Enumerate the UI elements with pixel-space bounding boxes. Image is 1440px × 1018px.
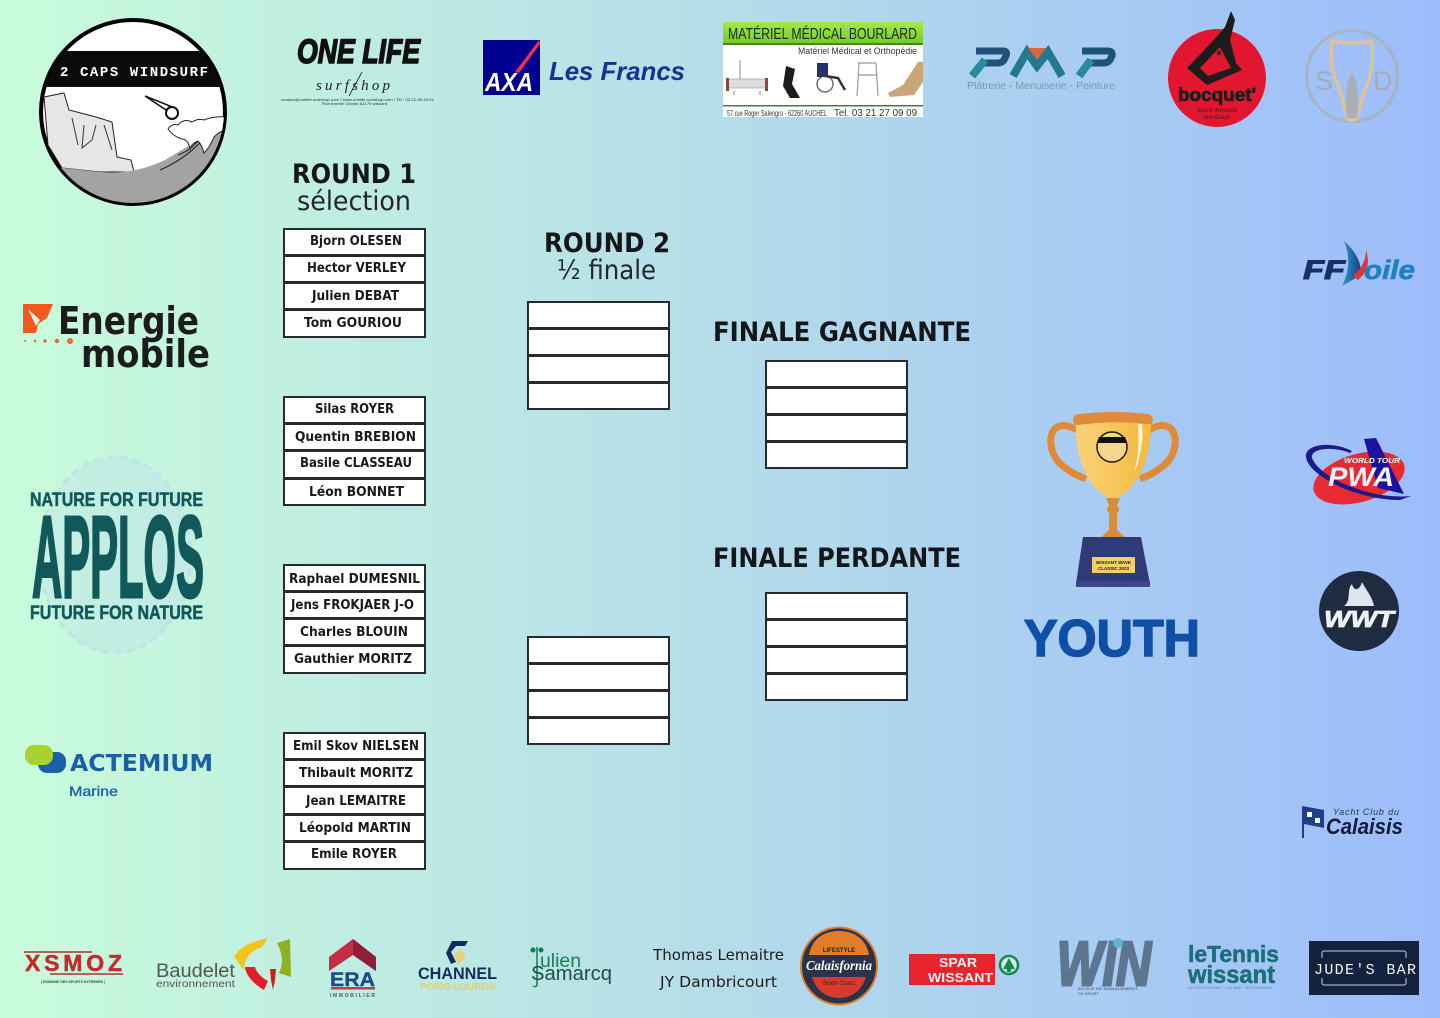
logo: Le Tennis Wissant: leTennis [1188,941,1279,967]
logo: Matériel Médical Bourlard: 57 rue Roger Salengro - 62260 AUCHEL [727,109,827,118]
bracket: round 1 group 3 [284,565,425,673]
bracket: round 1 group 4: Jean LEMAITRE [305,793,406,809]
text: JY Dambricourt: JY Dambricourt [659,973,777,991]
logo: Baudelet environnement: Baudelet [156,961,236,982]
logo: One Life surfshop: contact@onelife-surfshop.com / www.onelife-surfshop.com / Tel : 03.21.96.43.01 [281,97,435,102]
logo: Applos [30,457,204,653]
bracket: round 2 top [528,302,669,409]
bracket: round 1 group 1: Julien DEBAT [311,288,400,304]
plaque [1092,557,1135,573]
logo: Baudelet environnement [156,938,291,990]
icon: walking frame [857,63,878,96]
logo: Matériel Médical Bourlard: Matériel Médical et Orthopédie [798,46,917,56]
logo: PWA World Tour [1306,438,1411,514]
logo: Energie mobile [23,299,210,376]
logo: Matériel Médical Bourlard [723,22,923,119]
logo: WWT [1319,571,1399,651]
logo: SD dental: D [1373,66,1392,96]
bracket: round 1 group 4: Thibault MORITZ [299,765,413,781]
bracket: round 1 group 3: Jens FROKJAER J-O [290,597,414,613]
logo: ERA Immobilier: ERA [330,970,375,991]
bracket: round 1 group 1: Hector VERLEY [307,260,406,276]
title: Round 1: sélection [297,186,411,217]
logo: Bocquet: bocquet' [1178,85,1256,105]
logo: Actemium Marine: ACTEMIUM [70,751,213,777]
text: APPLOS [32,492,204,622]
logo: 2 Caps Windsurf [40,20,230,210]
logo: WIN: WIN [1057,930,1152,999]
logo: Jude's Bar [1309,941,1419,995]
bracket: round 1 group 1: Tom GOURIOU [304,315,402,331]
logo: Le Tennis Wissant [1187,941,1279,990]
logo: Jude's Bar: JUDE'S BAR [1314,962,1416,979]
logo: Applos: NATURE FOR FUTURE [30,490,203,511]
logo: Spar Wissant: WISSANT [928,970,993,985]
logo: SD dental [1306,30,1398,122]
icon: ankle brace [783,66,800,98]
logo: Le Tennis Wissant: UN RESTAURANT · UN BAR · RESTAURANT [1188,985,1274,990]
logo: PMP: Plâtrerie - Menuiserie - Peinture [967,81,1115,92]
logo: FF Voile: FF [1303,255,1347,285]
logo: PWA World Tour: WORLD TOUR [1344,458,1400,465]
title: Round 2 [544,228,670,286]
logo: Calaisfornia [801,928,877,1004]
logo: Baudelet environnement: environnement [156,979,235,990]
logo: XSMOZ: | DOMAINE DES SPORTS EXTREMES | [41,980,105,984]
logo: Actemium Marine [25,745,213,799]
logo: Spar Wissant: SPAR [939,955,978,970]
logo: Energie mobile: mobile [81,332,210,376]
logo: Le Tennis Wissant: wissant [1187,961,1276,989]
logo: Yacht Club du Calaisis: Calaisis [1326,814,1403,839]
bracket: round 1 group 2: Quentin BREBION [295,429,416,445]
logo: ERA Immobilier [329,939,376,999]
logo: Channel Poids Lourds [418,941,497,993]
logo: Calaisfornia: LIFESTYLE [823,948,855,954]
title: Finale perdante: FINALE PERDANTE [713,543,961,574]
logo: Bocquet [1168,11,1266,127]
title: Round 2: ROUND 2 [544,228,670,259]
title: Finale gagnante: FINALE GAGNANTE [713,317,971,348]
decorative globe [39,457,191,653]
logo: Bocquet: les-Eaux [1204,114,1231,121]
logo: ERA Immobilier: IMMOBILIER [330,993,375,999]
logo: WIN: ECOLE DE MANAGEMENT [1078,986,1139,991]
medal [1097,432,1127,462]
bracket: round 1 group 2: Léon BONNET [309,484,405,500]
logo: WIN: DU SPORT [1078,991,1099,996]
logo: Julien Samarcq [530,947,612,987]
logo: Energie mobile: Energie [58,299,199,343]
logo: PWA World Tour: PWA [1328,462,1394,492]
bracket: round 1 group 1 [284,229,425,337]
logo: XSMOZ: XSMOZ [25,950,122,976]
plaque: CLASSIC 2023 [1098,566,1130,571]
logo: AXA Les Francs: AXA [484,67,533,97]
bracket: round 1 group 4: Léopold MARTIN [299,820,411,836]
logo: Calaisfornia: North Coast [823,981,855,987]
bracket: round 1 group 4: Emil Skov NIELSEN [293,738,419,754]
icon: wheelchair [817,63,845,92]
bracket: round 1 group 4: Emile ROYER [311,846,398,862]
logo: Calaisfornia: Calaisfornia [806,959,872,974]
logo: Julien Samarcq: Samarcq [531,963,612,985]
logo: One Life surfshop [281,33,435,106]
logo: Spar Wissant [909,954,1018,985]
logo: Applos: FUTURE FOR NATURE [30,603,203,624]
logo: One Life surfshop: Rue Amelie Gevois 62179 wissant [322,101,388,106]
logo: Matériel Médical Bourlard: MATÉRIEL MÉDICAL BOURLARD [728,24,917,43]
logo: WWT: WWT [1324,606,1396,632]
logo: One Life surfshop: ONE LIFE [297,33,421,71]
plaque: WISSANT WAVE [1096,560,1131,565]
title: Round 1 [292,159,416,217]
logo: AXA Les Francs: Les Francs [549,56,685,86]
logo: FF Voile [1303,241,1415,286]
text: Thomas Lemaitre: Thomas Lemaitre [652,946,784,964]
logo: Julien Samarcq: ulien [540,951,581,972]
bracket: round 2 bottom [528,637,669,744]
bracket: round 1 group 1: Bjorn OLESEN [310,233,402,249]
bracket: round 1 group 2: Basile CLASSEAU [300,455,412,471]
logo: SD dental: S [1315,66,1333,96]
title: Round 2: ½ finale [557,255,656,286]
bracket: round 1 group 3: Raphael DUMESNIL [289,571,420,587]
logo: Bocquet: Saint-Amand [1197,107,1237,114]
bracket: finale perdante [766,593,907,700]
bracket: round 1 group 3: Charles BLOUIN [300,624,408,640]
icon: compression stocking [888,62,923,97]
logo: AXA Les Francs [483,40,685,97]
logo: Actemium Marine: Marine [69,783,118,799]
bracket: round 1 group 2 [284,397,425,505]
logo: Channel Poids Lourds: POIDS LOURDS [420,982,495,993]
icon: medical bed [726,60,768,95]
logo: FF Voile: oile [1364,255,1415,285]
logo: Channel Poids Lourds: CHANNEL [418,964,497,983]
logo: 2 Caps Windsurf: 2 CAPS WINDSURF [60,65,208,81]
label: YOUTH: YOUTH [1024,610,1200,668]
logo: One Life surfshop: surfshop [316,78,390,94]
icon: trophy [1051,412,1175,587]
bracket: round 1 group 3: Gauthier MORITZ [294,651,412,667]
logo: PMP [967,48,1115,92]
bracket: round 1 group 4 [284,733,425,869]
bracket: finale gagnante [766,361,907,468]
bracket: round 1 group 2: Silas ROYER [315,401,395,417]
logo: Matériel Médical Bourlard: Tel. 03 21 27 09 09 [834,108,917,119]
logo: Yacht Club du Calaisis [1302,806,1403,839]
logo: Yacht Club du Calaisis: Yacht Club du [1333,807,1399,817]
title: Round 1: ROUND 1 [292,159,416,190]
